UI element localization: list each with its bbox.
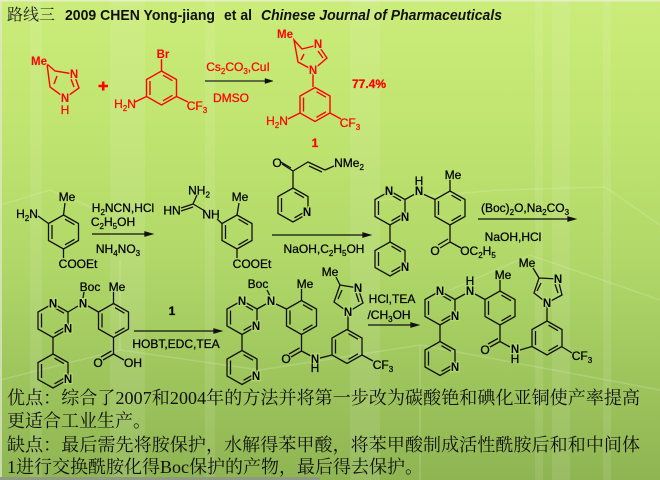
arrow: deprotection xyxy=(367,292,418,327)
Boc amide intermediate: N xyxy=(252,371,260,383)
reaction step 1 (red) xyxy=(31,29,386,150)
Boc amide intermediate: N xyxy=(252,321,260,333)
arrow: coupling: 1 xyxy=(169,304,176,318)
arrow: guanidine formation: NO xyxy=(118,242,136,256)
yield: 77.4% xyxy=(352,77,386,91)
Boc acid intermediate: N xyxy=(49,298,57,310)
enaminone reagent: N xyxy=(303,207,311,219)
reaction scheme (black) xyxy=(16,156,593,388)
arrow: deprotection: /CH xyxy=(367,308,388,322)
Boc amide intermediate: H xyxy=(311,361,319,375)
enaminone reagent: O xyxy=(272,156,282,170)
starting aniline ester: Me xyxy=(59,190,76,204)
3-bromo-5-trifluoromethylaniline: 2 xyxy=(123,104,128,113)
arrow: guanidine formation: 3 xyxy=(136,249,141,258)
title: et al xyxy=(224,7,252,24)
final product nilotinib: N xyxy=(554,274,562,286)
arrow: guanidine formation: 4 xyxy=(113,249,118,258)
arrow: coupling: HOBT,EDC,TEA xyxy=(132,337,220,351)
reaction arrow with conditions xyxy=(205,60,273,105)
Boc amide intermediate: Me xyxy=(322,265,339,279)
product 1: Me xyxy=(277,29,293,41)
ethyl ester intermediate: 2 xyxy=(478,251,483,260)
enaminone reagent: 2 xyxy=(359,163,364,172)
arrow: Boc protection and hydrolysis: (Boc) xyxy=(481,201,510,215)
product 1: N xyxy=(279,114,288,128)
guanidine intermediate: NH xyxy=(202,208,220,222)
guanidine intermediate: 2 xyxy=(205,190,210,200)
arrow: guanidine formation: 2 xyxy=(100,208,105,217)
final product nilotinib: O xyxy=(480,343,490,357)
final product nilotinib: Me xyxy=(495,268,512,282)
arrow: Boc protection and hydrolysis xyxy=(478,201,575,244)
arrow: deprotection: 3 xyxy=(388,315,393,324)
3-bromo-5-trifluoromethylaniline: N xyxy=(127,97,136,111)
product 1: 1 xyxy=(312,136,319,150)
guanidine intermediate: Me xyxy=(232,190,249,204)
guanidine intermediate xyxy=(163,184,272,271)
product 1: CF xyxy=(340,116,356,130)
3-bromo-5-trifluoromethylaniline: 3 xyxy=(203,106,208,115)
Boc acid intermediate: Me xyxy=(109,280,126,294)
reaction arrow with conditions: CO xyxy=(225,60,243,74)
Boc amide intermediate: N xyxy=(238,296,246,308)
ethyl ester intermediate: Me xyxy=(445,168,462,182)
commentary text: 缺点：最后需先将胺保护，水解得苯甲酸，将苯甲酸制成活性酰胺后和和中间体 xyxy=(7,435,640,455)
final product nilotinib: CF xyxy=(572,349,588,363)
arrow: guanidine formation: OH xyxy=(117,215,135,229)
final product nilotinib: H xyxy=(466,274,474,288)
arrow: pyrimidine formation: 2 xyxy=(329,249,334,258)
arrow: guanidine formation: H xyxy=(92,201,100,215)
enaminone reagent: NMe xyxy=(334,156,359,170)
arrow: coupling xyxy=(132,304,221,351)
Boc amide intermediate xyxy=(227,265,394,384)
Boc acid intermediate: N xyxy=(64,324,72,336)
final product nilotinib: Me xyxy=(519,256,536,270)
Boc amide intermediate: CF xyxy=(373,358,389,372)
reaction arrow with conditions: ,CuI xyxy=(248,60,270,74)
commentary text: 优点：综合了2007和2004年的方法并将第一步改为碳酸铯和碘化亚铜使产率提高 xyxy=(7,387,640,408)
final product nilotinib: 3 xyxy=(588,356,593,365)
Boc amide intermediate: N xyxy=(354,283,362,295)
ethyl ester intermediate: N xyxy=(415,186,423,198)
Boc amide intermediate: 3 xyxy=(389,365,394,374)
final product nilotinib: N xyxy=(451,311,459,323)
final product nilotinib: N xyxy=(466,286,474,298)
arrow: deprotection: OH xyxy=(393,308,411,322)
arrow: Boc protection and hydrolysis: 2 xyxy=(510,208,515,217)
reaction arrow with conditions: DMSO xyxy=(213,91,249,105)
arrow: guanidine formation: NCN,HCl xyxy=(105,201,154,215)
starting aniline ester: 2 xyxy=(25,214,30,223)
ethyl ester intermediate: 5 xyxy=(491,251,496,260)
ethyl ester intermediate: O xyxy=(430,244,440,258)
commentary text xyxy=(7,387,640,477)
commentary text: 1进行交换酰胺化得Boc保护的产物，最后得去保护。 xyxy=(7,457,423,477)
4-methylimidazole: Me xyxy=(31,56,47,68)
arrow: guanidine formation: 2 xyxy=(100,222,105,231)
ethyl ester intermediate: H xyxy=(415,174,423,188)
arrow: pyrimidine formation: H xyxy=(333,242,342,256)
Boc acid intermediate: OH xyxy=(124,356,142,370)
ethyl ester intermediate: N xyxy=(401,212,409,224)
product 1: 2 xyxy=(275,121,280,130)
4-methylimidazole: N xyxy=(61,93,69,105)
ethyl ester intermediate: H xyxy=(483,244,491,258)
reaction arrow with conditions: 2 xyxy=(221,67,226,76)
final product nilotinib: N xyxy=(543,298,551,310)
reaction arrow with conditions: 3 xyxy=(243,67,248,76)
starting aniline ester: N xyxy=(29,207,38,221)
starting aniline ester: COOEt xyxy=(59,257,98,271)
Boc amide intermediate: Boc xyxy=(248,277,268,291)
guanidine intermediate: COOEt xyxy=(233,257,272,271)
final product nilotinib: N xyxy=(511,344,519,356)
arrow: Boc protection and hydrolysis: CO xyxy=(547,201,565,215)
Boc acid intermediate: N xyxy=(64,374,72,386)
3-bromo-5-trifluoromethylaniline: Br xyxy=(157,49,170,61)
arrow: Boc protection and hydrolysis: NaOH,HCl xyxy=(485,230,541,244)
Boc acid intermediate: O xyxy=(93,356,103,370)
guanidine intermediate: NH xyxy=(188,184,205,198)
arrow: guanidine formation: C xyxy=(91,215,100,229)
arrow: Boc protection and hydrolysis: 3 xyxy=(565,208,570,217)
product 1: 3 xyxy=(356,123,361,132)
Boc amide intermediate: O xyxy=(281,352,291,366)
Boc acid intermediate xyxy=(38,280,142,388)
title: Chinese Journal of Pharmaceuticals xyxy=(261,7,502,24)
reaction arrow with conditions: Cs xyxy=(206,60,221,74)
4-methylimidazole xyxy=(31,56,79,117)
starting aniline ester xyxy=(16,190,98,271)
title xyxy=(7,6,502,24)
arrow: guanidine formation: 5 xyxy=(113,222,118,231)
arrow: deprotection: HCl,TEA xyxy=(369,292,415,306)
arrow: pyrimidine formation xyxy=(272,233,370,258)
arrow: pyrimidine formation: NaOH,C xyxy=(284,242,329,256)
title: 路线三 xyxy=(7,6,55,24)
product 1: N xyxy=(314,39,322,51)
title: 2009 CHEN Yong-jiang xyxy=(65,7,215,24)
ethyl ester intermediate: OC xyxy=(460,244,478,258)
Boc amide intermediate: Me xyxy=(297,277,314,291)
arrow: guanidine formation: H xyxy=(104,215,113,229)
final product nilotinib: H xyxy=(511,352,519,366)
ethyl ester intermediate xyxy=(375,168,496,276)
arrow: pyrimidine formation: OH xyxy=(346,242,364,256)
plus sign xyxy=(98,82,108,90)
arrow: guanidine formation: NH xyxy=(96,242,113,256)
product 1 xyxy=(266,29,361,150)
final product nilotinib xyxy=(425,256,593,376)
3-bromo-5-trifluoromethylaniline: H xyxy=(114,97,123,111)
product 1: H xyxy=(266,114,275,128)
starting aniline ester: H xyxy=(16,207,25,221)
arrow: Boc protection and hydrolysis: 2 xyxy=(542,208,547,217)
guanidine intermediate: HN xyxy=(163,204,181,218)
commentary text: 更适合工业生产。 xyxy=(7,411,151,431)
arrow: pyrimidine formation: 5 xyxy=(342,249,347,258)
Boc amide intermediate: N xyxy=(344,307,352,319)
arrow: Boc protection and hydrolysis: O,Na xyxy=(514,201,542,215)
Boc acid intermediate: N xyxy=(79,298,87,310)
4-methylimidazole: N xyxy=(70,69,78,81)
enaminone reagent xyxy=(272,156,364,222)
Boc acid intermediate: Boc xyxy=(80,280,100,294)
3-bromo-5-trifluoromethylaniline xyxy=(114,49,208,115)
Boc amide intermediate: N xyxy=(311,354,319,366)
final product nilotinib: N xyxy=(436,286,444,298)
arrow: guanidine formation xyxy=(91,201,154,258)
ethyl ester intermediate: N xyxy=(385,186,393,198)
product 1: N xyxy=(309,65,317,77)
4-methylimidazole: H xyxy=(61,103,69,117)
final product nilotinib: N xyxy=(451,362,459,374)
Boc amide intermediate: N xyxy=(267,296,275,308)
3-bromo-5-trifluoromethylaniline: CF xyxy=(187,99,203,113)
ethyl ester intermediate: N xyxy=(401,262,409,274)
